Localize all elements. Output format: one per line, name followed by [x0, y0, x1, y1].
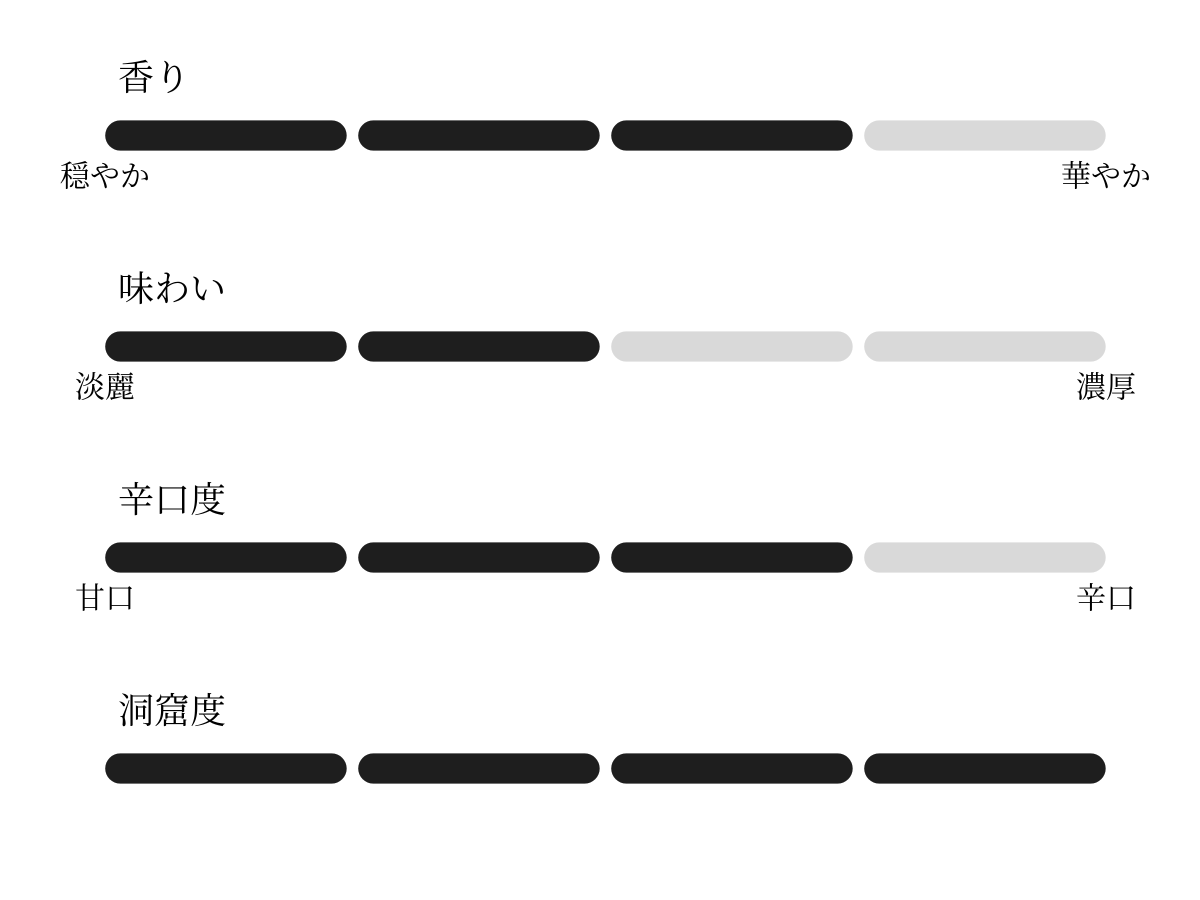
- right scale label: aroma: 華やか: [1061, 160, 1151, 194]
- panel: taste: [75, 269, 1136, 404]
- heading: taste: 味わい: [118, 269, 226, 309]
- heading: aroma: 香り: [118, 58, 190, 98]
- right scale label: taste: 濃厚: [1076, 372, 1136, 404]
- panel: dryness: [75, 480, 1136, 616]
- panel: cave aging: [105, 691, 1106, 784]
- rating bar: taste 2 of 4: [105, 331, 1106, 362]
- left scale label: taste: 淡麗: [75, 372, 135, 404]
- heading: dryness: 辛口度: [118, 480, 226, 520]
- heading: cave aging: 洞窟度: [118, 691, 226, 731]
- right scale label: dryness: 辛口: [1076, 582, 1136, 616]
- panel: aroma: [60, 58, 1151, 194]
- left scale label: aroma: 穏やか: [60, 160, 150, 194]
- left scale label: dryness: 甘口: [75, 582, 135, 616]
- rating bar: aroma 3 of 4: [105, 120, 1106, 151]
- rating bar: dryness 3 of 4: [105, 542, 1106, 573]
- rating bar: cave aging 4 of 4: [105, 753, 1106, 784]
